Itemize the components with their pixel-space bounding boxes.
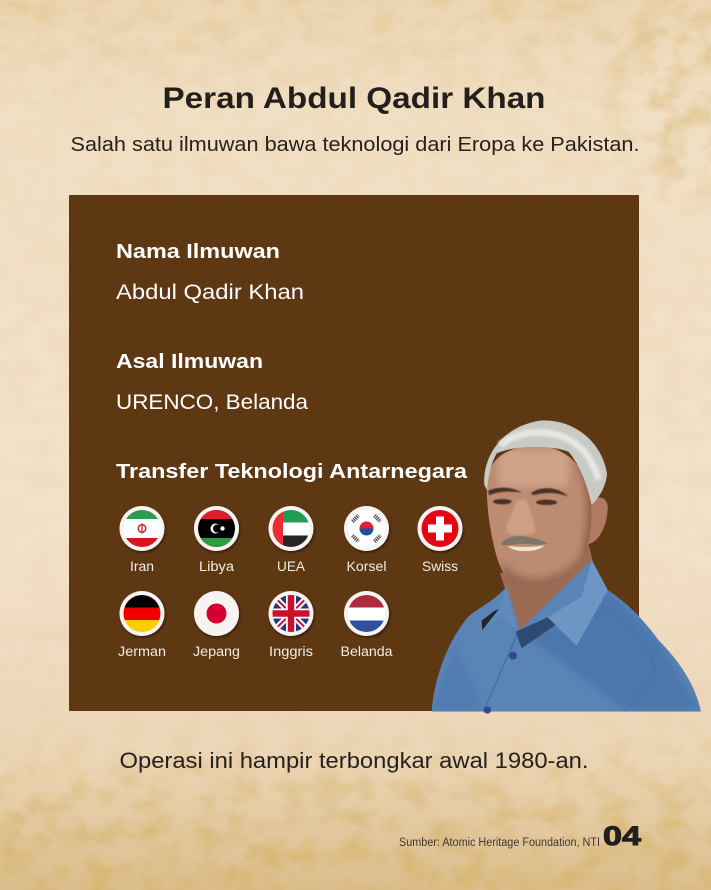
page number: 04 xyxy=(603,821,641,851)
flag: Libya xyxy=(194,506,239,551)
source note: Sumber: Atomic Heritage Foundation, NTI xyxy=(399,837,600,849)
flag: Jerman xyxy=(120,591,164,636)
country labels: Libya xyxy=(199,559,235,574)
title: Peran Abdul Qadir Khan xyxy=(162,82,546,115)
flag: Iran xyxy=(120,506,164,551)
scientist name block: Nama Ilmuwan xyxy=(116,240,280,263)
country labels: Inggris xyxy=(269,644,313,659)
face xyxy=(486,446,592,580)
country labels: Swiss xyxy=(422,559,458,574)
subtitle: Salah satu ilmuwan bawa teknologi dari Eropa ke Pakistan. xyxy=(70,133,640,156)
panel: scientist profile xyxy=(69,195,639,711)
country labels: Iran xyxy=(130,559,154,574)
eyebrows and eyes xyxy=(488,488,568,505)
country labels: Korsel xyxy=(346,559,387,574)
flag: Swiss xyxy=(418,506,462,551)
nose highlight xyxy=(506,500,535,535)
smile xyxy=(508,545,544,551)
technology transfer heading: Transfer Teknologi Antarnegara xyxy=(116,460,468,483)
portrait: Abdul Qadir Khan xyxy=(425,420,711,714)
scientist name block xyxy=(116,240,304,304)
scientist name block: Abdul Qadir Khan xyxy=(116,280,304,304)
flag: Jepang xyxy=(194,591,239,636)
neck xyxy=(500,543,593,633)
scientist origin block xyxy=(116,350,308,414)
country labels: UEA xyxy=(277,559,305,574)
panel background xyxy=(69,195,639,711)
flag: UEA xyxy=(268,506,314,551)
flag: Korsel xyxy=(344,506,389,551)
scientist origin block: Asal Ilmuwan xyxy=(116,350,263,373)
country labels: Jepang xyxy=(193,644,240,659)
shirt xyxy=(425,557,711,713)
flag: Belanda xyxy=(344,591,389,636)
country labels xyxy=(118,559,458,659)
moustache xyxy=(502,536,548,545)
ear xyxy=(588,498,608,544)
shirt collar xyxy=(482,560,608,714)
hair xyxy=(484,420,607,505)
flag: Inggris xyxy=(268,591,314,636)
scientist origin block: URENCO, Belanda xyxy=(116,390,308,414)
closing statement: Operasi ini hampir terbongkar awal 1980-an. xyxy=(120,748,588,773)
country labels: Jerman xyxy=(118,644,166,659)
country labels: Belanda xyxy=(340,644,393,659)
